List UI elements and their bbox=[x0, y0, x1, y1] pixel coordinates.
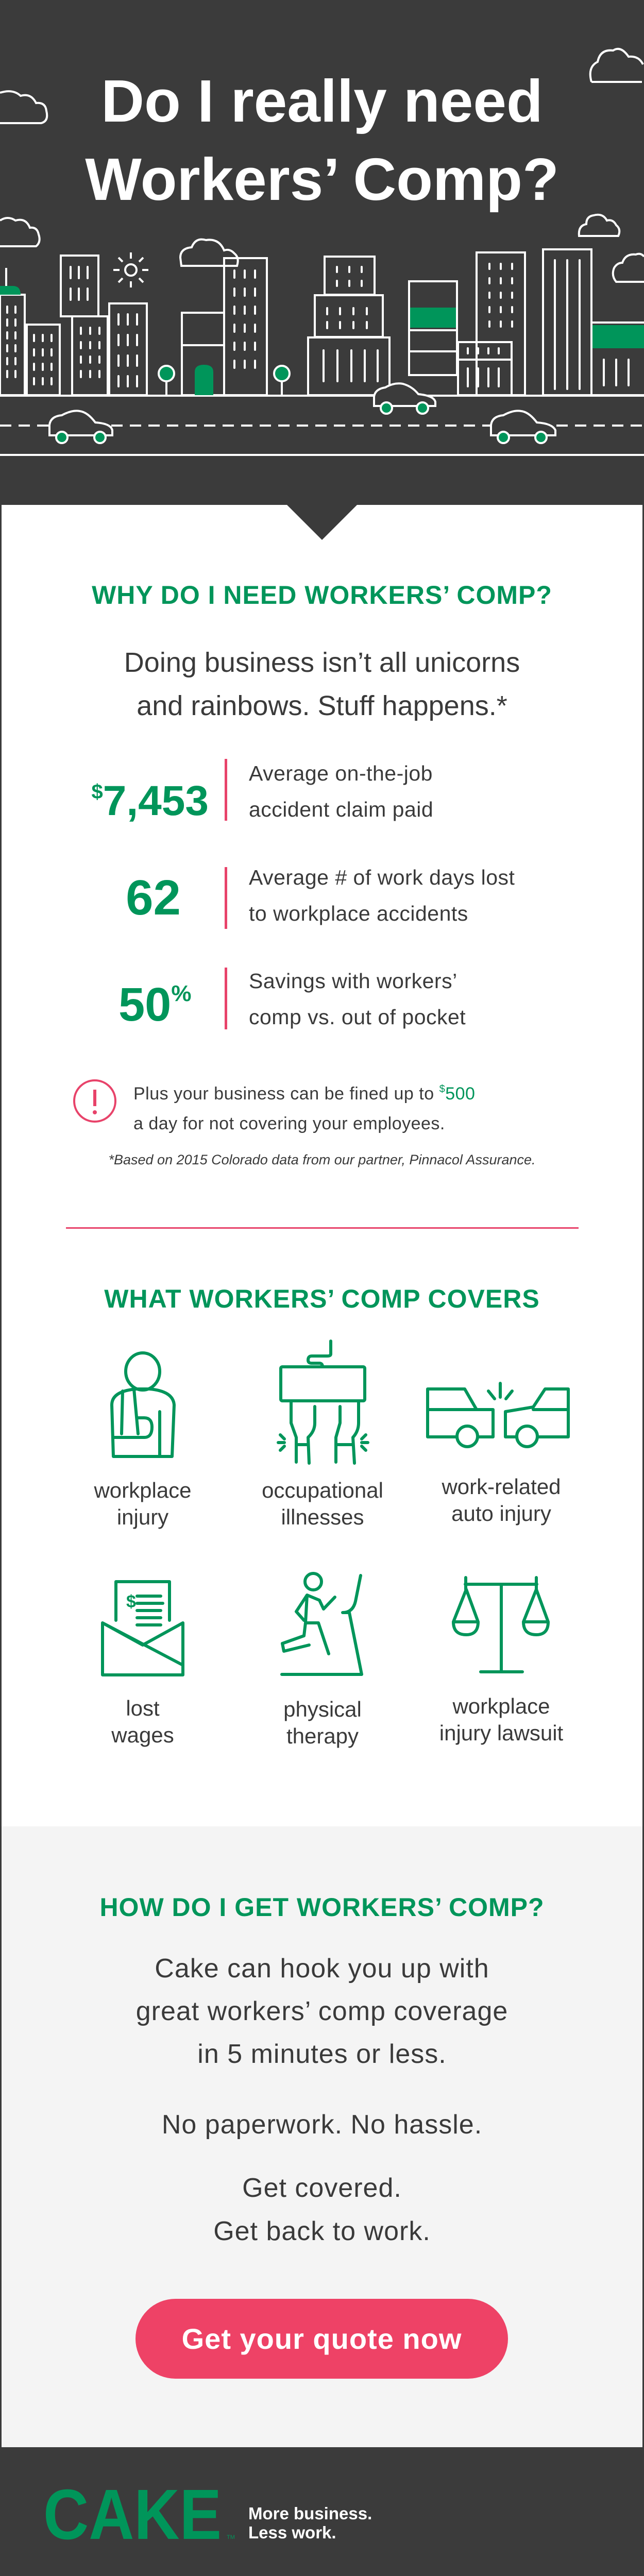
label: auto injury: work-related bbox=[442, 1475, 561, 1499]
sun bbox=[125, 264, 137, 276]
footer bbox=[0, 2447, 644, 2576]
icon: workplace injury bbox=[112, 1353, 174, 1456]
stat 3: 50% bbox=[118, 978, 191, 1031]
label: lost wages: lost bbox=[126, 1696, 160, 1720]
stat 2: 62 bbox=[126, 870, 181, 925]
stat 3: comp vs. out of pocket bbox=[249, 1005, 466, 1029]
stat 1: accident claim paid bbox=[249, 798, 433, 821]
callout: fine: Plus your business can be fined up to $500 bbox=[133, 1083, 475, 1104]
notch arrow bbox=[287, 505, 357, 540]
how text: great workers’ comp coverage bbox=[136, 1996, 508, 2026]
label: physical therapy: therapy bbox=[286, 1724, 359, 1748]
label: auto injury bbox=[442, 1475, 561, 1526]
clouds bbox=[590, 49, 643, 82]
footer tagline bbox=[248, 2504, 372, 2542]
heading: why: WHY DO I NEED WORKERS’ COMP? bbox=[92, 581, 552, 609]
how text: Cake can hook you up with bbox=[155, 1954, 489, 1984]
title: Workers’ Comp? bbox=[85, 146, 559, 213]
label: occupational illnesses: illnesses bbox=[281, 1505, 364, 1529]
label: workplace injury: injury bbox=[117, 1505, 168, 1529]
closing text bbox=[213, 2173, 431, 2246]
stat 1 bbox=[92, 759, 433, 824]
heading: how: HOW DO I GET WORKERS’ COMP? bbox=[99, 1893, 545, 1922]
closing text: Get back to work. bbox=[213, 2216, 431, 2246]
button: quote: Get your quote now bbox=[182, 2323, 462, 2355]
label: lawsuit bbox=[439, 1694, 563, 1745]
icon: lawsuit bbox=[453, 1578, 548, 1672]
icon: physical therapy bbox=[282, 1573, 362, 1674]
stat 3: Savings with workers’ bbox=[249, 969, 457, 993]
callout: fine bbox=[73, 1079, 475, 1133]
logo: cake: TM bbox=[227, 2534, 235, 2540]
closing text: Get covered. bbox=[242, 2173, 402, 2203]
panel: why bbox=[92, 581, 552, 721]
icon: occupational illnesses bbox=[278, 1341, 368, 1463]
footnote: *Based on 2015 Colorado data from our partner, Pinnacol Assurance. bbox=[108, 1152, 536, 1167]
icon: auto injury bbox=[428, 1383, 568, 1447]
title: Do I really need bbox=[101, 67, 543, 134]
intro text: and rainbows. Stuff happens.* bbox=[137, 690, 507, 721]
stat 2: Average # of work days lost bbox=[249, 866, 515, 889]
how text: in 5 minutes or less. bbox=[197, 2039, 447, 2069]
label: workplace injury: workplace bbox=[94, 1478, 192, 1502]
how text bbox=[136, 1954, 508, 2069]
panel: how bbox=[2, 1826, 642, 2447]
label: occupational illnesses: occupational bbox=[262, 1478, 383, 1502]
ground bbox=[0, 395, 644, 397]
title bbox=[85, 67, 559, 213]
icon: alert bbox=[73, 1079, 116, 1123]
footer tagline: Less work. bbox=[248, 2523, 336, 2542]
label: physical therapy bbox=[283, 1697, 362, 1748]
label: lost wages bbox=[111, 1696, 174, 1747]
button: quote bbox=[135, 2299, 508, 2379]
footer tagline: More business. bbox=[248, 2504, 372, 2523]
tagline text: No paperwork. No hassle. bbox=[162, 2110, 482, 2140]
icons grid: $ bbox=[126, 1592, 136, 1612]
stat 2: to workplace accidents bbox=[249, 902, 468, 925]
icons grid bbox=[101, 1340, 570, 1676]
label: physical therapy: physical bbox=[283, 1697, 362, 1721]
label: lawsuit: workplace bbox=[452, 1694, 550, 1718]
label: occupational illnesses bbox=[262, 1478, 383, 1529]
intro text bbox=[124, 647, 520, 721]
label: workplace injury bbox=[94, 1478, 192, 1529]
callout: fine: a day for not covering your employees. bbox=[133, 1114, 445, 1133]
stat 2 bbox=[126, 866, 515, 929]
stat 3 bbox=[118, 968, 466, 1031]
heading: covers: WHAT WORKERS’ COMP COVERS bbox=[104, 1284, 540, 1313]
stat 1: Average on-the-job bbox=[249, 761, 433, 785]
header panel bbox=[0, 0, 644, 505]
buildings bbox=[5, 268, 7, 286]
icon: lost wages bbox=[103, 1582, 183, 1675]
stat 1: $7,453 bbox=[92, 777, 209, 824]
label: auto injury: auto injury bbox=[451, 1501, 551, 1526]
cars bbox=[49, 383, 555, 435]
label: lawsuit: injury lawsuit bbox=[439, 1721, 563, 1745]
label: lost wages: wages bbox=[111, 1723, 174, 1747]
intro text: Doing business isn’t all unicorns bbox=[124, 647, 520, 678]
side borders bbox=[0, 505, 2, 2447]
city illustration bbox=[0, 47, 644, 456]
